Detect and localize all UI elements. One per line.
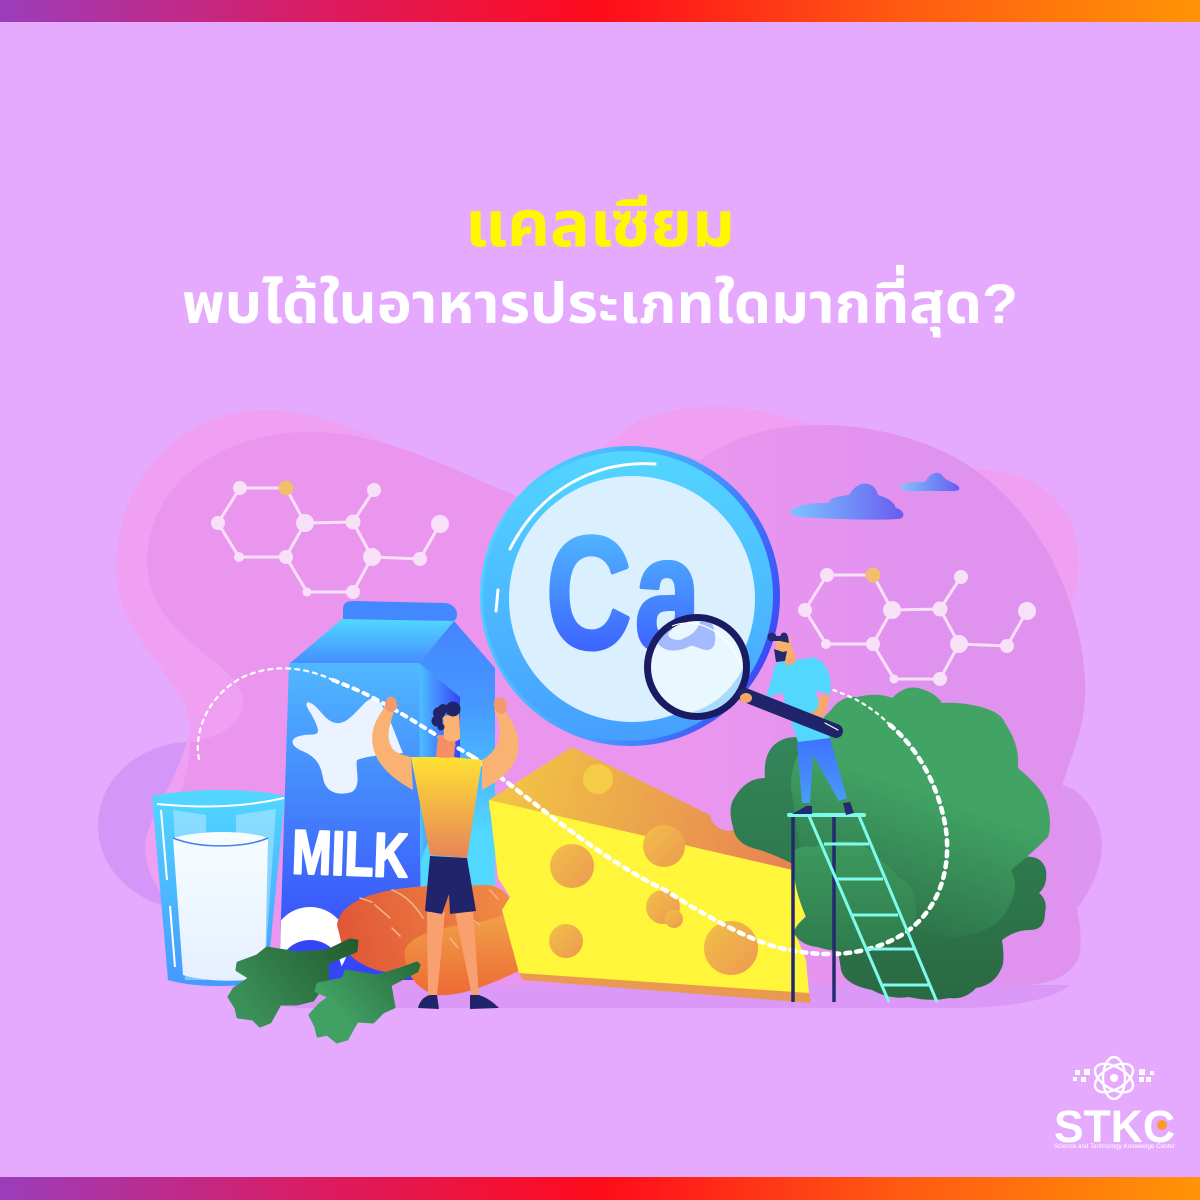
lettuce main bbox=[791, 687, 1050, 937]
flexing shirt bbox=[411, 757, 482, 858]
clouds bbox=[790, 473, 959, 520]
logo tagline: Science and Technology Knowledge Center bbox=[1054, 1144, 1175, 1150]
milk bbox=[173, 832, 268, 981]
carrot leaves bbox=[229, 940, 419, 1042]
flexing shorts bbox=[425, 856, 476, 914]
carton gable side bbox=[419, 621, 495, 890]
carrots bbox=[337, 885, 525, 995]
man shirt bbox=[766, 657, 831, 742]
cloud small bbox=[900, 473, 959, 491]
handle highlight bbox=[825, 723, 838, 730]
carrot back bbox=[337, 885, 511, 972]
flexing head bbox=[443, 713, 460, 742]
lens glass bbox=[650, 620, 744, 714]
top gradient bar bbox=[0, 0, 1200, 22]
lens ring bbox=[648, 618, 746, 716]
flexing shoes bbox=[418, 995, 499, 1009]
coin face bbox=[509, 476, 755, 722]
carrot lines bbox=[360, 890, 498, 948]
background blobs bbox=[98, 407, 1102, 1008]
carton cap bbox=[343, 601, 457, 621]
flexing neck bbox=[436, 735, 456, 758]
carton label MILK: MILK bbox=[291, 818, 409, 891]
bottom gradient bar bbox=[0, 1177, 1200, 1200]
ladder rails bbox=[809, 816, 937, 1002]
milk splash bbox=[292, 698, 403, 794]
glass tint bbox=[173, 809, 276, 980]
hand on handle bbox=[740, 693, 752, 703]
glass of milk bbox=[152, 790, 285, 986]
flexing hair bbox=[432, 702, 460, 730]
man head bbox=[776, 637, 793, 662]
molecule right bbox=[798, 568, 1036, 686]
logo dot bbox=[1157, 1120, 1167, 1130]
carton front bbox=[279, 663, 421, 980]
man legs bbox=[797, 738, 847, 803]
carton logo ring bbox=[280, 907, 346, 980]
lens tint bbox=[658, 622, 743, 713]
cloud large bbox=[790, 484, 903, 520]
glass highlight bbox=[157, 798, 284, 967]
man shoes bbox=[792, 802, 854, 815]
symbol Ca: Ca bbox=[546, 504, 702, 682]
title line 1: แคลเซียม bbox=[465, 188, 735, 260]
man neck bbox=[785, 650, 796, 666]
man beard bbox=[774, 649, 787, 662]
magnifying glass bbox=[648, 618, 838, 731]
molecule left bbox=[211, 480, 449, 599]
cheese top bbox=[489, 747, 806, 900]
coin ring bbox=[483, 451, 773, 741]
carton side inner bbox=[419, 663, 460, 860]
logo atom bbox=[1090, 1057, 1138, 1099]
calcium coin bbox=[480, 446, 780, 746]
logo STKC bbox=[1054, 1057, 1175, 1152]
leaf one bbox=[229, 940, 357, 1026]
carrot front bbox=[405, 915, 525, 995]
man inspecting bbox=[766, 632, 854, 815]
lettuce front leaf bbox=[793, 841, 916, 951]
ladder legs bbox=[793, 815, 834, 1002]
magnifier handle bbox=[745, 695, 836, 731]
lettuce back bbox=[730, 737, 1046, 1000]
flexing arms bbox=[372, 706, 519, 790]
title bbox=[182, 188, 1018, 338]
logo wordmark: STKC bbox=[1054, 1101, 1175, 1152]
lens highlight bbox=[672, 623, 741, 665]
cheese bottom rind bbox=[519, 972, 811, 1003]
logo pixels bbox=[1073, 1069, 1154, 1082]
ladder platform bbox=[789, 813, 864, 817]
leaf two bbox=[310, 963, 419, 1042]
lettuce bbox=[730, 687, 1050, 1000]
flexing hands bbox=[385, 697, 507, 714]
flexing legs bbox=[427, 912, 479, 996]
cheese bbox=[489, 747, 811, 1003]
coin highlight bbox=[510, 464, 655, 549]
man forearm bbox=[809, 695, 830, 717]
dashed orbit bbox=[198, 668, 947, 954]
man hair bbox=[768, 632, 789, 643]
glass body bbox=[152, 790, 285, 986]
coin rim bbox=[480, 446, 780, 746]
ladder bbox=[789, 815, 937, 1002]
carton slope bbox=[289, 619, 454, 664]
cheese holes bbox=[549, 764, 758, 975]
title line 2: พบได้ในอาหารประเภทใดมากที่สุด? bbox=[182, 264, 1018, 338]
cheese front bbox=[489, 800, 809, 993]
man flexing bbox=[372, 697, 519, 1009]
milk surface bbox=[173, 838, 268, 846]
milk carton bbox=[272, 601, 495, 1004]
